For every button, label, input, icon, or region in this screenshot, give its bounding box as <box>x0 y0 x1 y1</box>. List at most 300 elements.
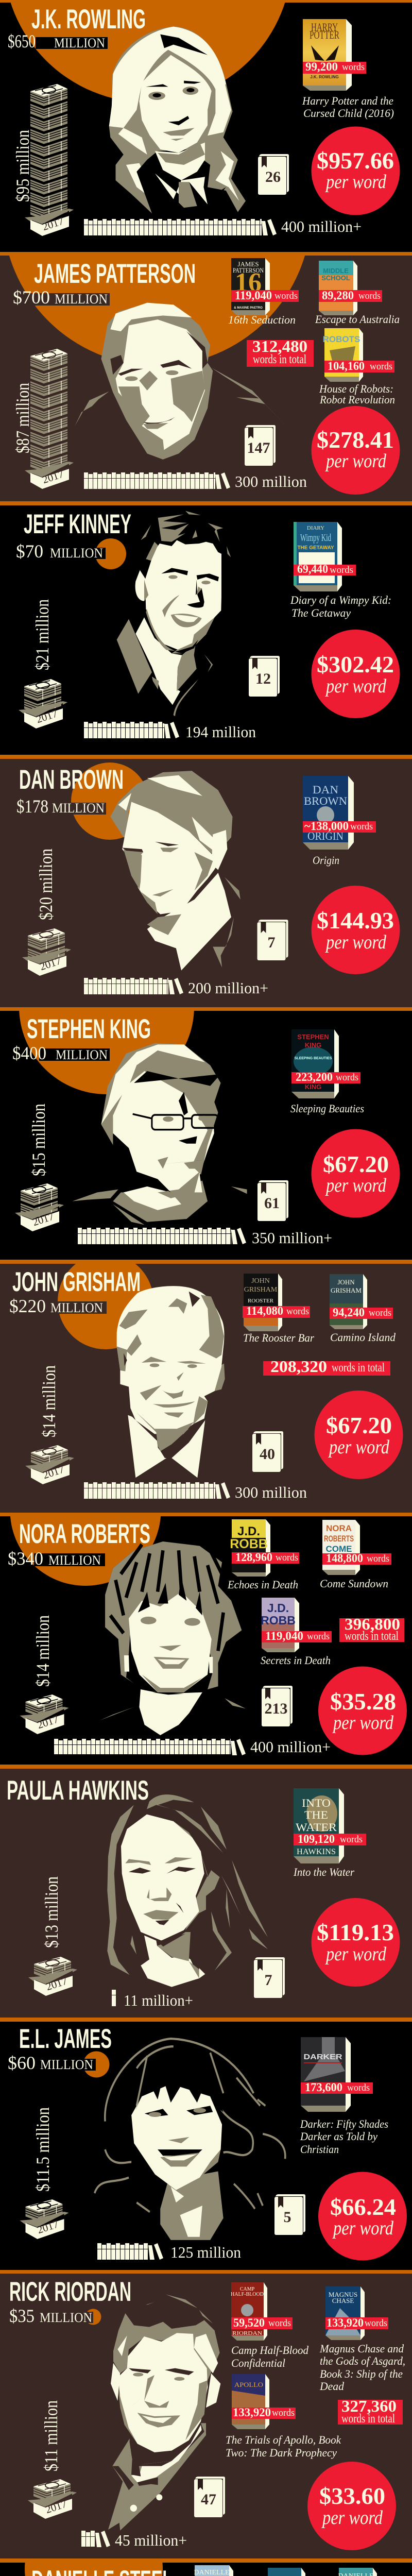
panel: Rick Riordan <box>0 2274 412 2558</box>
price per word: per word <box>332 2217 394 2239</box>
book title: Two: The Dark Prophecy <box>226 2446 337 2459</box>
icon: book count: 7 <box>265 1972 272 1989</box>
price per word: per word <box>328 1436 390 1458</box>
book: Camino Island <box>330 1274 393 1329</box>
net worth: $220 <box>9 1296 46 1316</box>
icon: book count: 5 <box>283 2209 291 2226</box>
book: Harry Potter: 99,200 <box>305 60 338 73</box>
heading: John Grisham: JOHN GRISHAM <box>12 1267 141 1297</box>
icon: book count <box>252 1431 283 1472</box>
book title: Cursed Child (2016) <box>303 107 394 120</box>
total words: 327,360 <box>341 2397 397 2415</box>
price per word: $144.93 <box>317 907 394 934</box>
price per word <box>311 1898 400 1987</box>
book: The Rooster Bar: ROOSTER <box>248 1298 274 1304</box>
icon: book count <box>254 1957 285 1998</box>
icon: money stack <box>19 679 67 728</box>
book: Come Sundown: ROBERTS <box>324 1534 354 1544</box>
panel: Paula Hawkins <box>0 1769 412 2018</box>
book title: Christian <box>300 2143 339 2156</box>
copies sold <box>81 2531 187 2549</box>
book: Trials of Apollo: APOLLO <box>234 2381 263 2388</box>
book: Echoes in Death: words <box>276 1552 298 1563</box>
book: Sleeping Beauties: KING <box>305 1041 321 1049</box>
icon: money stack: 2017 <box>44 2497 68 2516</box>
total words <box>247 337 314 367</box>
icon: book count <box>245 425 276 466</box>
book: Diary of a Wimpy Kid: 69,440 <box>297 563 328 575</box>
book: Camp Half-Blood Confidential: words <box>268 2318 291 2329</box>
book: Camp Half-Blood Confidential: CAMP <box>240 2286 255 2292</box>
book: Secrets in Death: ROBB <box>261 1614 296 1627</box>
icon: money stack: 2017 <box>44 1974 69 1993</box>
price per word: $67.20 <box>323 1151 389 1177</box>
net worth <box>8 1548 101 1569</box>
total words <box>263 1357 390 1376</box>
copies sold: 45 million+ <box>115 2531 187 2549</box>
book: 16th Seduction: words <box>274 291 298 301</box>
net worth: $178 <box>16 796 48 817</box>
icon: money stack <box>25 1445 74 1484</box>
net worth <box>16 796 105 817</box>
net worth: $35 <box>9 2306 35 2326</box>
copies sold <box>84 722 256 741</box>
icon: book count: 26 <box>265 168 281 185</box>
icon: money stack <box>22 928 71 976</box>
earnings 2017: $21 million <box>32 599 53 670</box>
total words: words in total <box>345 1630 399 1643</box>
earnings 2017: $14 million <box>39 1365 59 1437</box>
book: Camp Half-Blood Confidential: RIORDAN <box>232 2330 262 2336</box>
net worth: MILLION <box>40 2310 92 2325</box>
book: Magnus Chase: 133,920 <box>327 2316 364 2329</box>
book: Sleeping Beauties: KING <box>305 1083 321 1091</box>
book: Sleeping Beauties: words <box>336 1072 358 1083</box>
panel: John Grisham <box>0 1253 412 1513</box>
price per word: per word <box>324 675 387 697</box>
book: Sleeping Beauties: SLEEPING BEAUTIES <box>295 1057 332 1060</box>
book: Secrets in Death: words <box>307 1631 330 1642</box>
price per word: per word <box>332 1712 394 1734</box>
net worth: MILLION <box>55 292 108 307</box>
panel: E.L. James <box>0 2022 412 2270</box>
book: 16th Seduction: 119,040 <box>235 289 272 302</box>
portrait: Dan Brown <box>110 771 241 971</box>
price per word: per word <box>321 2507 383 2529</box>
icon: money stack: 2017 <box>31 1210 56 1228</box>
price per word <box>318 2172 407 2261</box>
copies sold: 11 million+ <box>124 1991 193 2009</box>
book: Escape to Australia: words <box>358 291 381 301</box>
net worth: $60 <box>8 2053 36 2073</box>
heading: James Patterson: JAMES PATTERSON <box>34 259 196 289</box>
book: 16th Seduction: PATTERSON <box>233 266 264 274</box>
book: Origin: words <box>350 821 373 832</box>
book: 16th Seduction <box>231 258 299 315</box>
icon: money stack: 2017 <box>41 467 65 486</box>
copies sold: 400 million+ <box>281 217 362 235</box>
book title: Come Sundown <box>320 1577 388 1590</box>
book title <box>319 382 395 406</box>
copies sold <box>54 1738 331 1756</box>
book: Darker: 173,600 <box>305 2081 342 2094</box>
portrait: Stephen King <box>72 1043 247 1225</box>
net worth: MILLION <box>50 546 103 561</box>
price per word: per word <box>324 171 387 193</box>
heading: Jeff Kinney: JEFF KINNEY <box>24 509 131 539</box>
book: Harry Potter: POTTER <box>310 28 339 41</box>
heading: Stephen King: STEPHEN KING <box>27 1014 151 1044</box>
icon: money stack: 2017 <box>36 1713 60 1731</box>
net worth: $70 <box>16 541 43 562</box>
net worth: MILLION <box>50 1300 103 1315</box>
panel: Jeff Kinney <box>0 505 412 755</box>
book title <box>226 2433 341 2459</box>
book title: Harry Potter and the <box>302 94 393 107</box>
portrait: E.L. James <box>95 2039 285 2240</box>
copies sold <box>84 472 307 490</box>
price per word: $119.13 <box>317 1919 394 1945</box>
book: Darker <box>301 2037 373 2112</box>
price per word <box>311 127 400 215</box>
book: Origin: BROWN <box>304 794 347 807</box>
net worth: MILLION <box>54 36 105 50</box>
earnings 2017: $13 million <box>41 1876 62 1948</box>
book: Magnus Chase: CHASE <box>332 2297 354 2304</box>
book: The Rooster Bar: GRISHAM <box>244 1286 278 1294</box>
book: Into the Water <box>294 1788 366 1863</box>
heading: Dan Brown: DAN BROWN <box>19 765 124 795</box>
book: Diary of a Wimpy Kid: words <box>330 565 353 575</box>
book: Magnus Chase <box>325 2286 388 2340</box>
book title: the Gods of Asgard, <box>320 2354 405 2367</box>
price per word: $278.41 <box>317 427 394 453</box>
panel: James Patterson <box>0 252 412 501</box>
book: Come Sundown <box>322 1520 391 1575</box>
icon: book count <box>258 920 288 960</box>
icon: money stack: 2017 <box>41 1463 66 1481</box>
book title <box>319 2342 405 2393</box>
book: Origin: ~138,000 <box>304 820 349 833</box>
net worth: $400 <box>12 1043 46 1063</box>
net worth: MILLION <box>52 801 105 816</box>
total words: 208,320 <box>270 1357 327 1376</box>
book: 16th Seduction: & MAXINE PAETRO <box>234 307 263 310</box>
book title: Secrets in Death <box>261 1654 331 1667</box>
heading: J.K. Rowling: J.K. ROWLING <box>31 4 146 35</box>
book: Magnus Chase: words <box>365 2318 387 2329</box>
book: Diary of a Wimpy Kid: Wimpy Kid <box>300 532 331 544</box>
icon: book count <box>262 1686 293 1726</box>
heading: E.L. James: E.L. JAMES <box>19 2024 112 2054</box>
book: Camino Island: JOHN <box>337 1278 355 1286</box>
book: The Rooster Bar: JOHN <box>251 1277 270 1285</box>
book title: The Rooster Bar <box>243 1331 314 1344</box>
book: Echoes in Death: J.D. <box>237 1524 260 1538</box>
book: Harry Potter: HARRY <box>311 21 338 33</box>
book title: The Trials of Apollo, Book <box>226 2433 341 2446</box>
book: Against All Odds <box>338 2568 409 2576</box>
book: Sleeping Beauties: STEPHEN <box>297 1033 329 1041</box>
icon: book count <box>249 656 280 697</box>
earnings 2017: $11 million <box>41 2400 61 2471</box>
heading: Nora Roberts: NORA ROBERTS <box>19 1519 150 1549</box>
earnings 2017: $14 million <box>32 1615 53 1687</box>
book: Origin <box>303 776 376 850</box>
icon: book count: 40 <box>260 1446 275 1463</box>
net worth: $340 <box>8 1548 43 1569</box>
icon: book count: 7 <box>268 934 275 951</box>
book: Camino Island: GRISHAM <box>331 1286 362 1294</box>
book title: Camp Half-Blood <box>231 2344 309 2357</box>
price per word <box>318 1666 407 1755</box>
portrait: Nora Roberts <box>100 1541 246 1735</box>
book: Trials of Apollo <box>232 2374 296 2429</box>
book: Camp Half-Blood Confidential: 59,520 <box>233 2316 265 2329</box>
book: Magnus Chase: MAGNUS <box>329 2291 357 2298</box>
panel: Danielle Steel <box>25 2563 377 2576</box>
panel: Dan Brown <box>0 759 412 1008</box>
book: House of Robots: ROBOTS <box>323 334 360 344</box>
book: House of Robots: 104,160 <box>328 360 365 372</box>
copies sold <box>84 1482 307 1501</box>
net worth <box>8 2053 93 2073</box>
book: 16th Seduction: JAMES <box>237 260 259 268</box>
net worth: MILLION <box>56 1047 108 1062</box>
book title: Origin <box>313 854 339 867</box>
portrait: Jeff Kinney <box>117 511 231 716</box>
price per word: per word <box>324 931 387 953</box>
book: Into the Water: INTO <box>302 1797 331 1809</box>
book: Diary of a Wimpy Kid: DIARY <box>307 525 324 531</box>
book: Trials of Apollo: words <box>272 2408 295 2418</box>
book: The Rooster Bar <box>243 1274 310 1331</box>
book: Come Sundown: 148,800 <box>326 1552 363 1565</box>
icon: money stack: 2017 <box>36 2217 60 2236</box>
icon: money stack <box>15 1183 64 1231</box>
price per word: $957.66 <box>317 147 394 174</box>
book: Harry Potter: J.K. ROWLING <box>310 75 339 79</box>
net worth <box>9 2306 92 2326</box>
book title: Diary of a Wimpy Kid: <box>290 594 391 606</box>
book: Camino Island: words <box>369 1308 391 1318</box>
portrait: John Grisham <box>117 1286 225 1478</box>
net worth <box>16 541 103 562</box>
book: Diary of a Wimpy Kid <box>294 522 356 591</box>
earnings 2017: $11.5 million <box>32 2107 53 2192</box>
price per word: $302.42 <box>317 651 394 677</box>
price per word <box>311 886 400 974</box>
book: Escape to Australia: MIDDLE <box>323 267 349 275</box>
icon: book count: 147 <box>247 439 270 456</box>
book: Come Sundown: NORA <box>326 1523 352 1533</box>
book: Into the Water: THE <box>304 1808 328 1821</box>
book title: The Getaway <box>291 606 351 619</box>
copies sold <box>97 2243 241 2261</box>
total words <box>339 1615 404 1643</box>
portrait: J.K. Rowling <box>109 27 246 215</box>
book: Come Sundown: words <box>367 1553 389 1564</box>
icon: book count <box>258 1180 288 1221</box>
heading: Rick Riordan: RICK RIORDAN <box>9 2277 131 2307</box>
book: Secrets in Death: 119,040 <box>265 1630 303 1642</box>
price per word <box>307 2462 396 2550</box>
net worth <box>9 1296 103 1316</box>
price per word <box>311 630 400 718</box>
copies sold: 350 million+ <box>252 1229 332 1247</box>
earnings 2017: $87 million <box>12 383 33 453</box>
book: Into the Water: HAWKINS <box>297 1848 336 1856</box>
book: The Rooster Bar: words <box>286 1306 309 1317</box>
panel: Nora Roberts <box>8 1516 407 1755</box>
book title: Darker as Told by <box>300 2130 377 2143</box>
book title: Magnus Chase and <box>319 2342 404 2355</box>
book: Darker: DARKER <box>304 2053 342 2061</box>
panel: Stephen King <box>13 1011 400 1244</box>
price per word: per word <box>324 450 387 472</box>
copies sold <box>84 217 362 235</box>
price per word <box>311 406 400 495</box>
copies sold: 300 million <box>235 472 307 490</box>
book title: Sleeping Beauties <box>290 1102 364 1115</box>
book title: House of Robots: <box>319 382 393 395</box>
book: Diary of a Wimpy Kid: THE GETAWAY <box>297 545 334 551</box>
icon: money stack: 2017 <box>41 214 65 233</box>
price per word: $66.24 <box>330 2194 396 2220</box>
book: Into the Water: WATER <box>296 1821 337 1834</box>
net worth: $700 <box>13 287 50 308</box>
portrait: Rick Riordan <box>108 2294 220 2531</box>
book title: Camino Island <box>330 1331 396 1344</box>
book: Into the Water: 109,120 <box>298 1833 335 1845</box>
copies sold <box>78 1228 332 1247</box>
book: Sleeping Beauties <box>291 1029 360 1098</box>
book: Secrets in Death <box>261 1598 332 1652</box>
total words: words in total <box>332 1361 385 1375</box>
price per word: per word <box>324 1175 387 1196</box>
net worth <box>8 31 105 52</box>
book: Escape to Australia: 89,280 <box>322 289 354 302</box>
heading: Paula Hawkins: PAULA HAWKINS <box>7 1775 149 1806</box>
icon: money stack <box>20 2199 69 2239</box>
net worth: MILLION <box>48 1553 101 1568</box>
book: Echoes in Death <box>230 1519 299 1577</box>
book: Trials of Apollo: 133,920 <box>233 2406 271 2419</box>
book: Dangerous Games <box>268 2568 332 2576</box>
book: Sleeping Beauties: 223,200 <box>296 1071 333 1083</box>
copies sold <box>84 978 268 997</box>
copies sold: 300 million <box>235 1483 307 1501</box>
copies sold: 400 million+ <box>250 1738 331 1756</box>
book: House of Robots: words <box>370 361 392 372</box>
book: Escape to Australia: SCHOOL <box>321 274 350 282</box>
net worth: $650 <box>8 31 36 52</box>
book: Echoes in Death: 128,960 <box>235 1551 272 1564</box>
book title: Robot Revolution <box>319 393 395 406</box>
copies sold: 194 million <box>185 723 256 741</box>
book: Origin: DAN <box>313 783 338 796</box>
price per word: $35.28 <box>330 1688 396 1715</box>
book: Camp Half-Blood Confidential <box>231 2282 293 2341</box>
price per word <box>314 1391 403 1479</box>
portrait: James Patterson <box>75 303 288 460</box>
icon: book count <box>274 2194 305 2235</box>
icon: book count: 61 <box>264 1195 280 1212</box>
book: Origin: ORIGIN <box>307 829 344 842</box>
copies sold: 200 million+ <box>188 979 268 997</box>
price per word <box>311 1129 400 1218</box>
earnings 2017: $15 million <box>28 1104 49 1176</box>
book: Harry Potter <box>303 19 366 91</box>
earnings 2017: $20 million <box>36 849 56 920</box>
book: Harry Potter: words <box>342 62 365 73</box>
book title <box>231 2344 309 2369</box>
book title: 16th Seduction <box>228 313 296 326</box>
icon: money stack <box>25 349 74 489</box>
book title: Confidential <box>231 2357 285 2369</box>
book: Camino Island: 94,240 <box>333 1306 365 1319</box>
icon: book count: 213 <box>265 1700 287 1717</box>
book: House of Robots <box>323 328 394 382</box>
book title: Echoes in Death <box>227 1578 298 1591</box>
panel: J.K. Rowling <box>0 0 412 252</box>
book title: Book 3: Ship of the <box>320 2367 403 2380</box>
icon: book count: 12 <box>255 670 271 687</box>
price per word: $67.20 <box>326 1412 392 1438</box>
icon: book count <box>258 154 289 195</box>
icon: book count <box>194 2477 225 2517</box>
icon: money stack <box>20 1694 69 1734</box>
net worth <box>12 1043 108 1063</box>
book: Into the Water: words <box>340 1834 363 1845</box>
book: Camp Half-Blood Confidential: HALF-BLOOD <box>231 2292 264 2297</box>
icon: money stack <box>25 84 74 236</box>
book title <box>302 94 394 120</box>
book: The Rooster Bar: 114,080 <box>246 1304 283 1317</box>
icon: money stack: 2017 <box>35 707 59 725</box>
book title <box>290 594 391 619</box>
book: 16th Seduction: 16 <box>235 268 262 297</box>
total words: words in total <box>341 2412 395 2426</box>
book: Escape to Australia <box>319 261 382 315</box>
copies sold: 125 million <box>170 2243 241 2261</box>
icon: book count: 47 <box>201 2491 216 2508</box>
net worth <box>13 287 108 308</box>
book title <box>300 2117 388 2156</box>
price per word: per word <box>324 1943 387 1965</box>
total words <box>338 2397 403 2426</box>
book: The Mistress <box>194 2565 262 2576</box>
portrait: Paula Hawkins <box>107 1794 268 1987</box>
book: Secrets in Death: J.D. <box>267 1601 289 1615</box>
book: Darker: words <box>347 2082 370 2093</box>
icon: money stack: 2017 <box>38 954 63 973</box>
total words: words in total <box>253 353 306 366</box>
icon: money stack <box>28 1957 77 1996</box>
book title: Escape to Australia <box>315 313 400 326</box>
price per word: $33.60 <box>319 2483 385 2509</box>
total words: 312,480 <box>252 337 307 355</box>
icon: money stack <box>28 2479 77 2519</box>
book title: Into the Water <box>293 1866 354 1878</box>
earnings 2017: $95 million <box>12 130 33 202</box>
book title: Darker: Fifty Shades <box>300 2117 388 2130</box>
book: Echoes in Death: ROBB <box>230 1537 268 1551</box>
book: Come Sundown: COME <box>325 1544 352 1554</box>
book title: Dead <box>319 2380 345 2393</box>
total words: 396,800 <box>345 1615 400 1633</box>
net worth: MILLION <box>40 2057 93 2072</box>
